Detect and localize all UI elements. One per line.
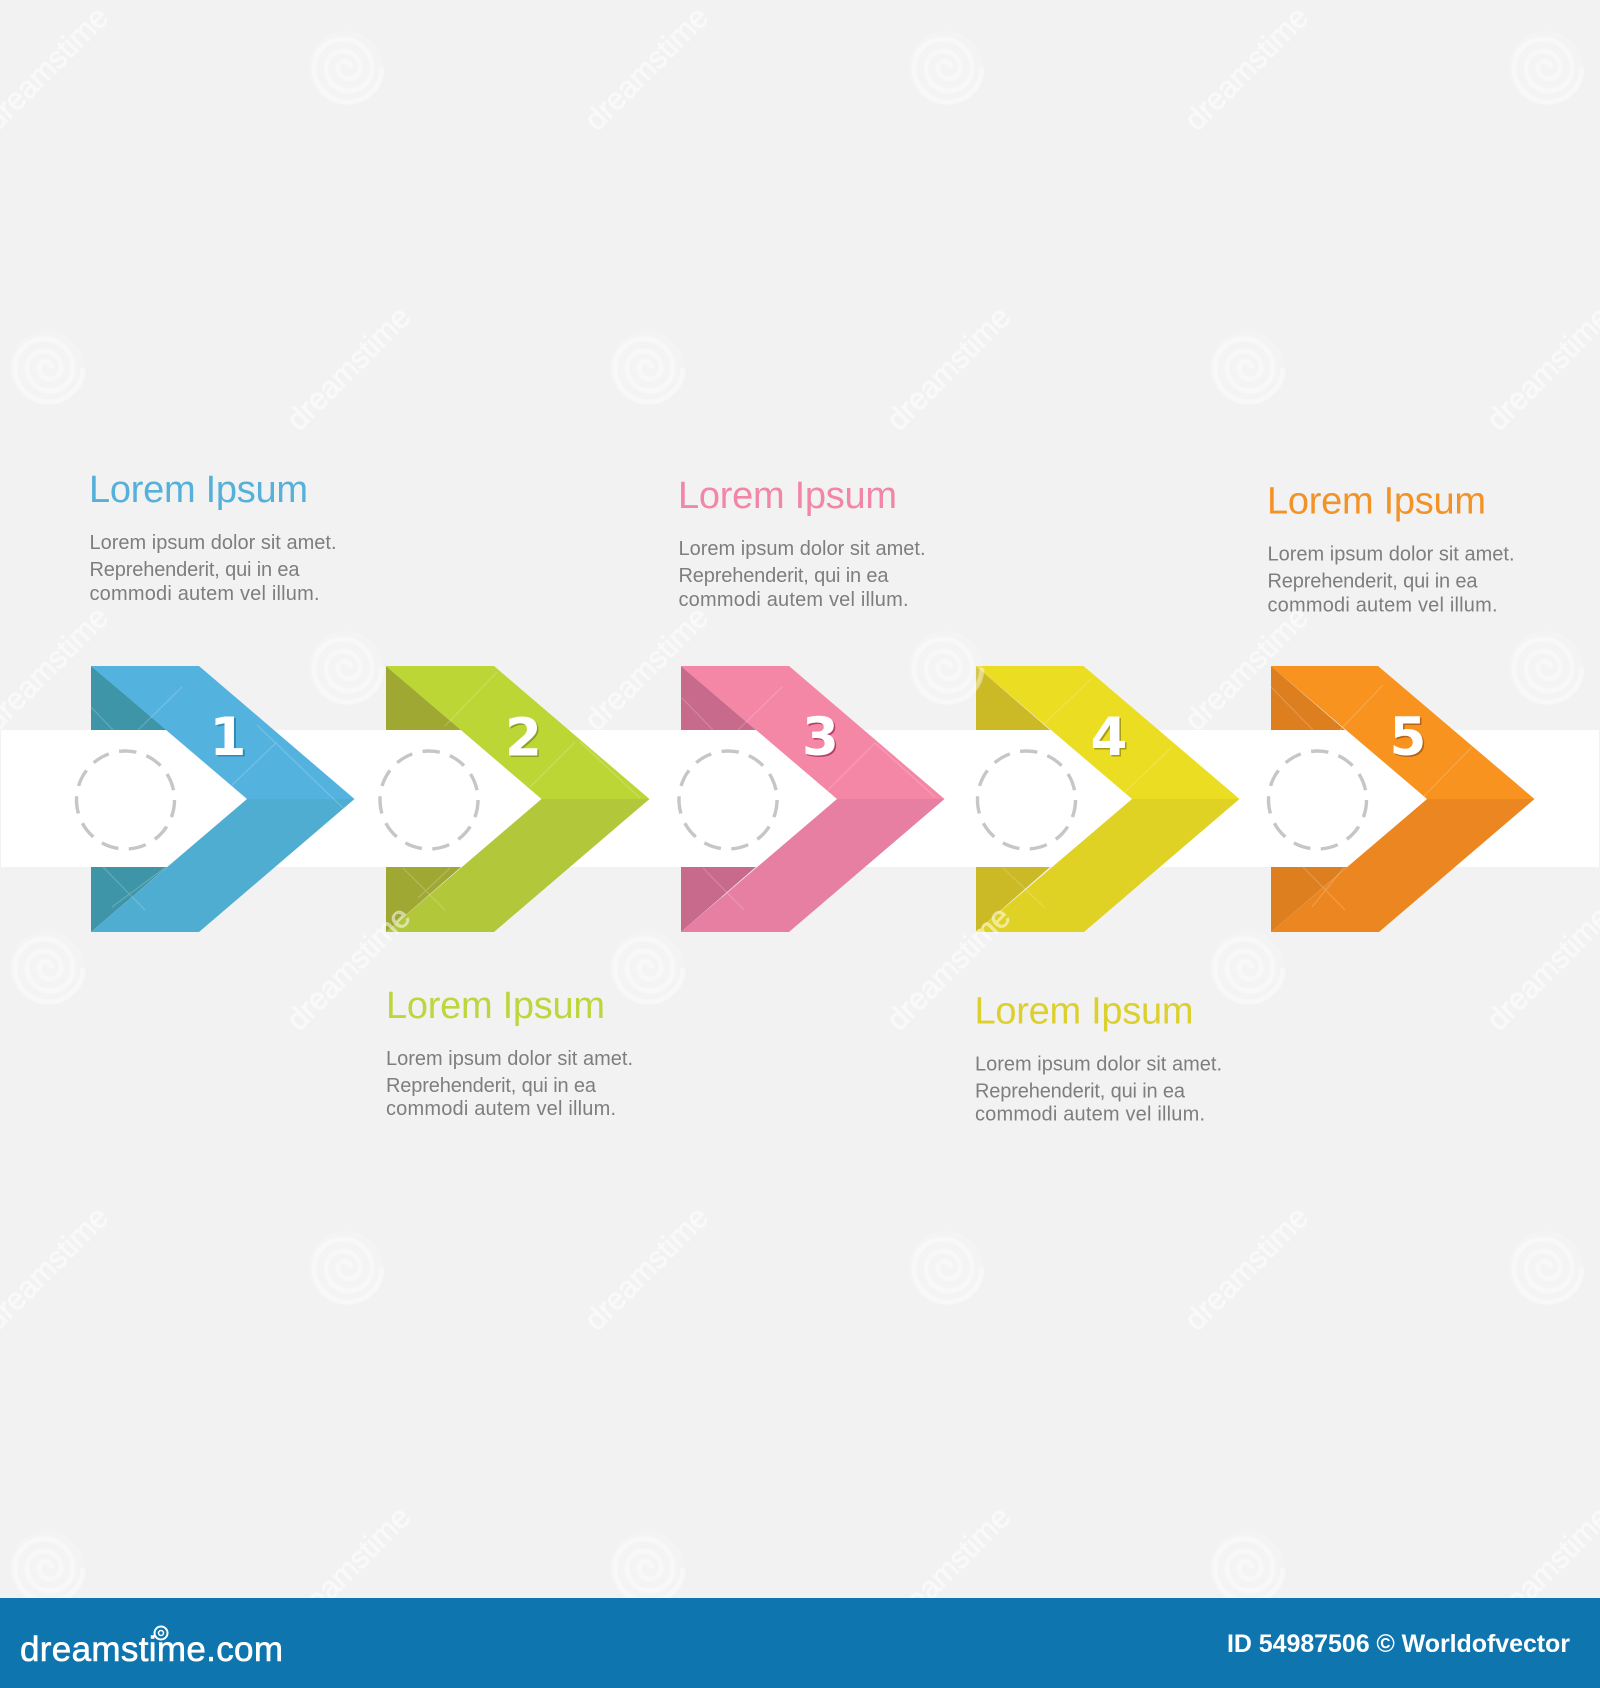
description 3: commodi autem vel illum. [678, 589, 908, 611]
white timeline band [1, 730, 1599, 867]
arrow 4 [976, 666, 1240, 932]
dashed circle 1 [76, 751, 174, 849]
description 5: Reprehenderit, qui in ea [1268, 570, 1478, 592]
description 4: Reprehenderit, qui in ea [975, 1080, 1186, 1102]
description 3: Lorem ipsum dolor sit amet. [678, 538, 926, 560]
watermark pattern: dreamstime [279, 1499, 417, 1637]
step 1 [76, 469, 354, 932]
watermark pattern: dreamstime [279, 899, 417, 1037]
description 1 [90, 532, 336, 605]
number 5: 5 [1391, 708, 1428, 770]
watermark pattern: dreamstime [577, 599, 715, 737]
arrow 5 [1271, 666, 1534, 932]
watermark pattern: dreamstime [577, 0, 715, 137]
heading 5: Lorem Ipsum [1267, 480, 1486, 522]
watermark pattern: dreamstime [879, 899, 1017, 1037]
watermark pattern: dreamstime [879, 299, 1017, 437]
footer logo: dreamstime.com [20, 1630, 283, 1669]
description 4: commodi autem vel illum. [975, 1104, 1205, 1126]
watermark pattern: dreamstime [279, 299, 417, 437]
watermark pattern: dreamstime [1177, 599, 1315, 737]
step 5 [1267, 480, 1534, 932]
footer bar [0, 1598, 1600, 1688]
number 4: 4 [1092, 708, 1129, 770]
description 2: Reprehenderit, qui in ea [386, 1075, 597, 1097]
watermark pattern: dreamstime [1177, 1199, 1315, 1337]
description 5 [1268, 544, 1514, 616]
step 2 [380, 666, 650, 1120]
description 1: commodi autem vel illum. [90, 583, 320, 605]
description 2: Lorem ipsum dolor sit amet. [386, 1048, 633, 1070]
heading 2: Lorem Ipsum [386, 985, 605, 1027]
description 3 [678, 538, 926, 611]
number 3: 3 [804, 708, 840, 770]
dashed circle 4 [978, 751, 1076, 849]
number 2: 2 [505, 708, 542, 768]
description 1: Reprehenderit, qui in ea [90, 559, 300, 581]
step 3 [678, 475, 944, 932]
description 1: Lorem ipsum dolor sit amet. [90, 532, 336, 554]
footer credit: ID 54987506 © Worldofvector [1227, 1630, 1570, 1658]
heading 1: Lorem Ipsum [89, 469, 308, 511]
number 5: 5 [1390, 707, 1426, 768]
description 5: Lorem ipsum dolor sit amet. [1268, 544, 1514, 566]
arrow 2 [386, 666, 650, 932]
dashed circle 3 [679, 751, 777, 849]
heading 4: Lorem Ipsum [974, 990, 1194, 1032]
arrow 3 [681, 666, 944, 932]
number 2: 2 [507, 709, 543, 770]
heading 3: Lorem Ipsum [678, 475, 897, 517]
number 1: 1 [212, 708, 248, 770]
description 4 [975, 1054, 1222, 1126]
step 4 [974, 666, 1240, 1126]
dashed circle 5 [1268, 751, 1366, 849]
description 2: commodi autem vel illum. [386, 1098, 616, 1120]
description 5: commodi autem vel illum. [1268, 594, 1498, 616]
number 1: 1 [210, 707, 246, 768]
description 2 [386, 1048, 633, 1120]
watermark pattern: dreamstime [879, 1499, 1017, 1637]
dashed circle 2 [380, 751, 478, 849]
watermark pattern: dreamstime [577, 1199, 715, 1337]
arrow 1 [91, 666, 354, 932]
watermark pattern: dreamstime [1177, 0, 1315, 137]
number 4: 4 [1091, 707, 1127, 768]
description 4: Lorem ipsum dolor sit amet. [975, 1054, 1222, 1076]
description 3: Reprehenderit, qui in ea [678, 565, 889, 587]
number 3: 3 [802, 707, 839, 768]
